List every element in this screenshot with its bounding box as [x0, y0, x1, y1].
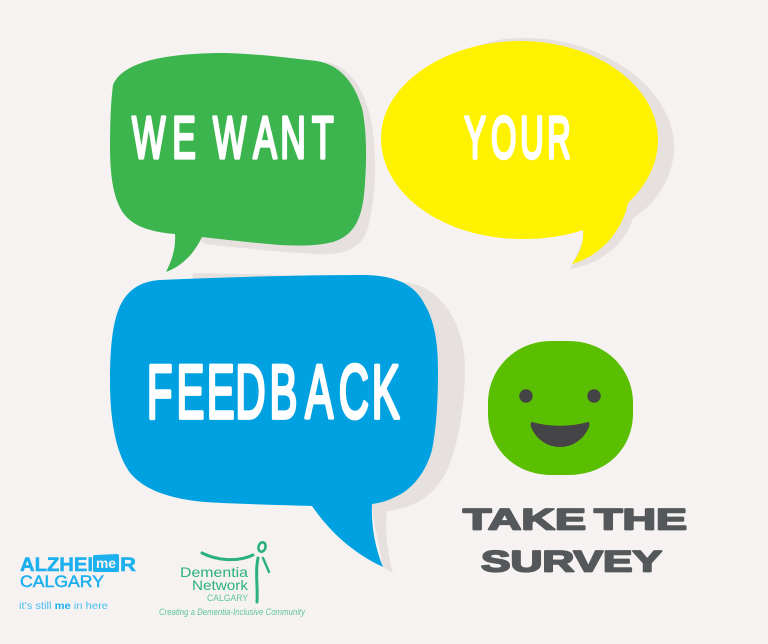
logo: Alzheimer Calgary: it's still me in here — [19, 600, 108, 612]
logo: Alzheimer Calgary: R — [120, 555, 136, 576]
yellow bubble shape — [381, 41, 658, 264]
logo: Alzheimer Calgary — [19, 554, 136, 612]
logo: Dementia Network Calgary: Dementia — [180, 564, 248, 580]
call to action: take the survey: SURVEY — [481, 546, 662, 578]
icon: figure with outstretched arm — [202, 541, 269, 602]
logo: Dementia Network Calgary: Network — [192, 577, 249, 593]
heading: FEEDBACK: FEEDBACK — [147, 349, 400, 434]
panel: green speech bubble — [110, 53, 375, 272]
logo: Alzheimer Calgary: ALZHEI — [20, 555, 93, 576]
logo: Dementia Network Calgary: CALGARY — [207, 593, 248, 603]
heading: YOUR: YOUR — [464, 106, 571, 172]
call to action: take the survey — [463, 504, 687, 578]
panel: blue speech bubble — [110, 273, 465, 573]
logo: Alzheimer Calgary: me — [96, 555, 116, 571]
call to action: take the survey: TAKE THE — [463, 504, 687, 536]
icon: smiley face — [488, 341, 633, 475]
logo: Dementia Network Calgary — [159, 541, 306, 618]
heading: WE WANT: WE WANT — [132, 106, 334, 171]
logo: Dementia Network Calgary: Creating a Dementia-Inclusive Community — [159, 607, 306, 618]
logo: Alzheimer Calgary: CALGARY — [20, 572, 104, 591]
panel: yellow speech bubble — [381, 38, 674, 269]
green bubble shape — [110, 53, 366, 272]
blue bubble shape — [110, 275, 438, 567]
